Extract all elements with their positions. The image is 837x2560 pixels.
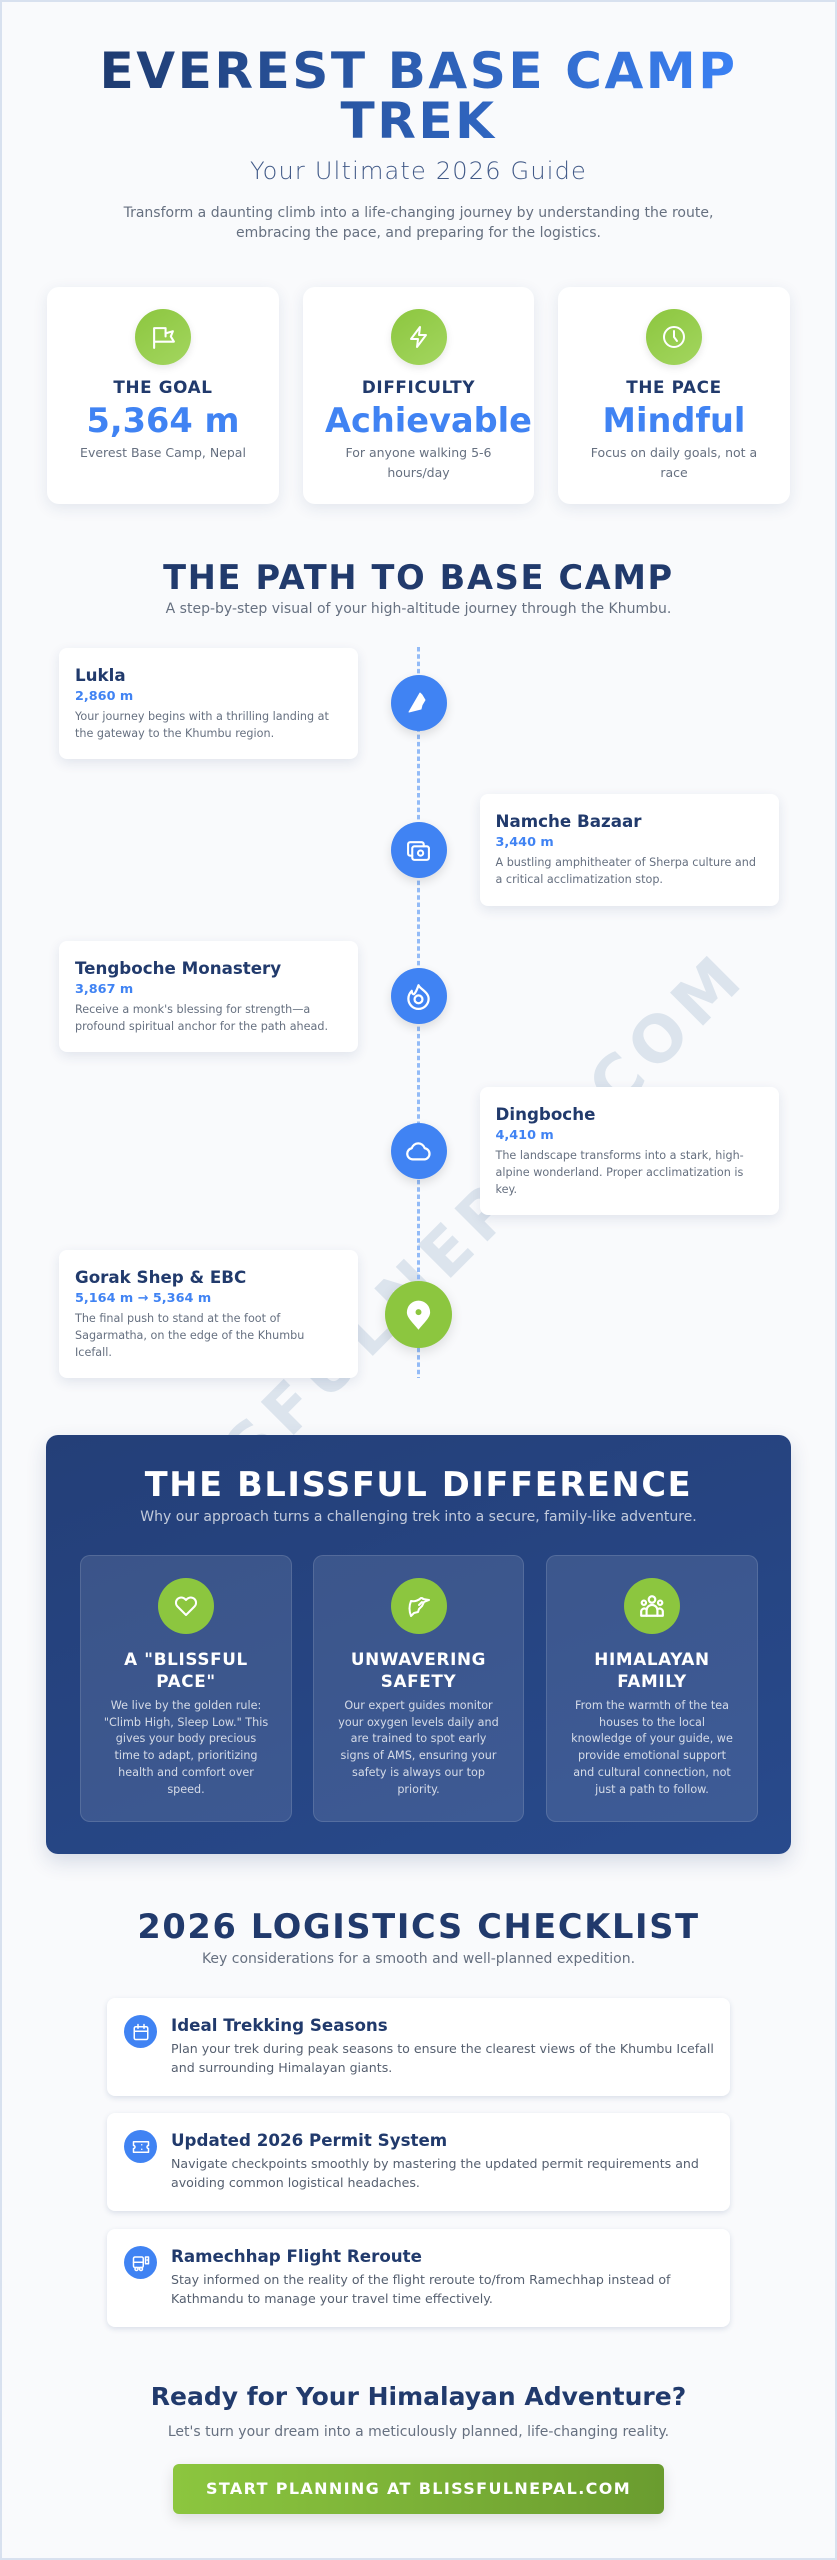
note: hours/day: [387, 465, 450, 480]
icon: cloud: [390, 1123, 446, 1179]
description: The final push to stand at the foot of: [75, 1312, 280, 1325]
card text: priority.: [397, 1783, 440, 1796]
stop: Dingboche: [480, 1087, 778, 1215]
description: [496, 856, 756, 886]
icon: calendar: [124, 2015, 157, 2048]
item text: Navigate checkpoints smoothly by mastering the updated permit requirements and: [171, 2156, 699, 2171]
description: [495, 1149, 744, 1196]
icon: people: [624, 1578, 680, 1634]
call to action heading: Ready for Your Himalayan Adventure?: [151, 2382, 686, 2411]
description: Your journey begins with a thrilling landing at: [75, 710, 329, 723]
call to action text: Let's turn your dream into a meticulously planned, life-changing reality.: [168, 2424, 669, 2440]
item text: Kathmandu to manage your travel time effectively.: [171, 2291, 493, 2306]
note: For anyone walking 5-6: [345, 445, 492, 460]
card text: health and comfort over: [118, 1766, 254, 1779]
card heading: PACE": [156, 1671, 216, 1691]
card text: safety is always our top: [352, 1766, 485, 1779]
card text: your oxygen levels daily and: [338, 1716, 499, 1729]
title: [90, 46, 747, 146]
intro text: Transform a daunting climb into a life-changing journey by understanding the route,: [124, 205, 713, 221]
card text: signs of AMS, ensuring your: [341, 1749, 496, 1762]
title: EVEREST BASE CAMP: [99, 41, 738, 100]
card text: just a path to follow.: [595, 1783, 709, 1796]
note: Focus on daily goals, not a: [591, 445, 757, 460]
stop: Namche Bazaar: [480, 794, 778, 906]
subheading: logistics: Key considerations for a smooth and well-planned expedition.: [202, 1951, 635, 1967]
description: the gateway to the Khumbu region.: [75, 727, 274, 740]
item text: avoiding common logistical headaches.: [171, 2175, 420, 2190]
item text: [171, 2041, 714, 2075]
note: [591, 445, 757, 480]
altitude: 3,440 m: [496, 835, 554, 850]
icon: mountain: [390, 675, 446, 731]
altitude: 2,860 m: [75, 689, 133, 704]
icon: ticket: [124, 2130, 157, 2163]
icon: map pin: [385, 1280, 452, 1348]
card: blissful pace: [80, 1555, 292, 1822]
heading: path: THE PATH TO BASE CAMP: [163, 558, 674, 597]
panel: the blissful difference: [46, 1435, 791, 1854]
icon: heart: [158, 1578, 214, 1634]
icon: camera: [390, 822, 446, 878]
stop name: Namche Bazaar: [496, 811, 641, 831]
card text: time to adapt, prioritizing: [114, 1749, 258, 1762]
card text: provide emotional support: [578, 1749, 726, 1762]
stop: Tengboche Monastery: [59, 941, 358, 1052]
label: DIFFICULTY: [362, 377, 475, 397]
description: [75, 710, 329, 740]
description: Receive a monk's blessing for strength—a: [75, 1003, 310, 1016]
card text: [338, 1699, 499, 1796]
card text: "Climb High, Sleep Low." This: [104, 1716, 268, 1729]
title: TREK: [340, 91, 497, 150]
icon: clock: [646, 309, 702, 365]
card text: are trained to spot early: [351, 1732, 486, 1745]
stop name: Gorak Shep & EBC: [75, 1267, 246, 1287]
item title: Ramechhap Flight Reroute: [171, 2246, 422, 2266]
card text: Our expert guides monitor: [344, 1699, 493, 1712]
description: key.: [496, 1183, 517, 1196]
card text: [104, 1699, 268, 1796]
card text: knowledge of your guide, we: [571, 1732, 733, 1745]
value: 5,364 m: [87, 401, 239, 440]
description: A bustling amphitheater of Sherpa culture and: [496, 856, 756, 869]
panel heading: THE BLISSFUL DIFFERENCE: [145, 1465, 692, 1504]
timeline line: [417, 647, 420, 1378]
subtitle: Your Ultimate 2026 Guide: [250, 157, 587, 185]
checklist: seasons: [107, 1998, 730, 2096]
cards row: [80, 1555, 758, 1822]
watermark: BLISSFULNEPAL.COM: [77, 938, 761, 1622]
card heading: SAFETY: [381, 1671, 456, 1691]
checklist: permit: [107, 2113, 730, 2211]
item text: and surrounding Himalayan giants.: [171, 2060, 392, 2075]
card heading: [124, 1649, 248, 1691]
card text: houses to the local: [599, 1716, 705, 1729]
card heading: [594, 1649, 710, 1691]
icon: bolt: [391, 309, 447, 365]
intro text: embracing the pace, and preparing for the logistics.: [236, 225, 601, 241]
description: Icefall.: [75, 1346, 112, 1359]
stop: Lukla: [59, 648, 358, 759]
note: Everest Base Camp, Nepal: [80, 445, 246, 460]
altitude: 4,410 m: [496, 1128, 554, 1143]
label: THE PACE: [626, 377, 722, 397]
description: profound spiritual anchor for the path ahead.: [75, 1020, 328, 1033]
item text: Plan your trek during peak seasons to ensure the clearest views of the Khumbu Icefall: [171, 2041, 714, 2056]
label: THE GOAL: [113, 377, 213, 397]
description: [75, 1003, 328, 1033]
description: [74, 1312, 304, 1359]
icon: shield leaf: [391, 1578, 447, 1634]
description: Sagarmatha, on the edge of the Khumbu: [75, 1329, 304, 1342]
heading: logistics: 2026 LOGISTICS CHECKLIST: [137, 1907, 700, 1946]
value: Mindful: [603, 401, 745, 440]
card: himalayan family: [546, 1555, 758, 1822]
value: Achievable: [325, 401, 532, 440]
stop: Gorak Shep & EBC: [59, 1250, 358, 1378]
description: a critical acclimatization stop.: [496, 873, 663, 886]
note: race: [660, 465, 688, 480]
intro text: [124, 205, 713, 241]
icon: bus: [124, 2246, 157, 2279]
card heading: UNWAVERING: [351, 1649, 486, 1669]
button: [173, 2464, 664, 2514]
card text: speed.: [167, 1783, 205, 1796]
card heading: FAMILY: [617, 1671, 687, 1691]
note: [345, 445, 492, 480]
item text: Stay informed on the reality of the flight reroute to/from Ramechhap instead of: [171, 2272, 670, 2287]
item title: Ideal Trekking Seasons: [171, 2015, 388, 2035]
altitude: 5,164 m → 5,364 m: [75, 1291, 211, 1306]
description: The landscape transforms into a stark, high-: [496, 1149, 744, 1162]
card heading: A "BLISSFUL: [124, 1649, 248, 1669]
stat card: the goal: [47, 287, 279, 504]
card text: gives your body precious: [116, 1732, 256, 1745]
card text: From the warmth of the tea: [575, 1699, 729, 1712]
stop name: Tengboche Monastery: [75, 958, 281, 978]
subheading: path: A step-by-step visual of your high-altitude journey through the Khumbu.: [166, 601, 671, 617]
card text: [571, 1699, 733, 1796]
card text: We live by the golden rule:: [111, 1699, 261, 1712]
card: unwavering safety: [313, 1555, 524, 1822]
panel subheading: Why our approach turns a challenging trek into a secure, family-like adventure.: [140, 1509, 697, 1525]
item text: [171, 2156, 699, 2190]
stop name: Lukla: [75, 665, 126, 685]
item title: Updated 2026 Permit System: [171, 2130, 447, 2150]
stat card: difficulty: [303, 287, 534, 504]
stat card: the pace: [558, 287, 790, 504]
icon: flame: [390, 968, 446, 1024]
button: START PLANNING AT BLISSFULNEPAL.COM: [206, 2479, 631, 2498]
card heading: HIMALAYAN: [594, 1649, 710, 1669]
altitude: 3,867 m: [75, 982, 133, 997]
description: alpine wonderland. Proper acclimatization is: [496, 1166, 743, 1179]
card heading: [351, 1649, 486, 1691]
item text: [171, 2272, 671, 2306]
stop name: Dingboche: [496, 1104, 595, 1124]
checklist: flight: [107, 2229, 730, 2327]
card text: and cultural connection, not: [573, 1766, 731, 1779]
icon: flag: [135, 309, 191, 365]
